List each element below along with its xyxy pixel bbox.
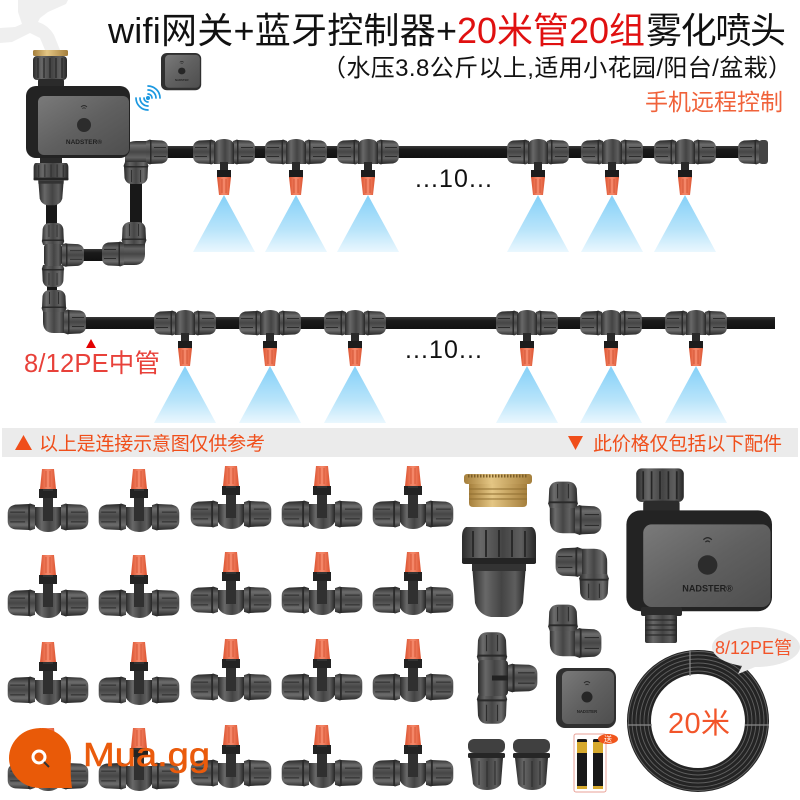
PE pipe coil [628,651,769,790]
tee fitting [477,632,537,724]
upper spray cones [193,195,716,252]
brass adapter small [33,50,68,56]
pipe type bubble: 8/12PE管 [715,638,792,658]
water timer controller [26,56,130,158]
pipe type bubble [712,627,800,674]
gateway [556,668,616,728]
batteries [574,734,618,792]
diagram pipes [46,146,775,329]
gateway small [161,53,201,90]
left side fittings [42,140,168,334]
end caps [468,739,550,790]
subtitle: （水压3.8公斤以上,适用小花园/阳台/盆栽） [322,55,792,82]
title [107,10,786,51]
Mua.gg watermark [9,728,210,788]
ellipsis labels: ...10... [415,165,492,193]
batteries: 送 [604,734,612,744]
notice band: 以上是连接示意图仅供参考 [39,433,265,455]
upper end cap [738,140,768,164]
title: 20米管20组 [457,10,645,51]
notice band [2,428,798,457]
ellipsis labels [405,165,492,364]
controller product [626,468,772,643]
lower spray cones [154,366,727,423]
watermark faucet [0,0,68,50]
upper nozzle tees [193,139,716,195]
remote control label: 手机远程控制 [645,89,783,115]
notice band: 此价格仅包括以下配件 [593,433,782,455]
length label: 20米 [668,707,730,740]
elbow fittings [548,482,609,658]
ellipsis labels: ...10... [405,336,482,364]
lower nozzle tees [154,310,727,366]
Mua.gg watermark: Mua.gg [83,736,210,773]
tap connector [462,527,536,617]
pipe label: 8/12PE中管 [24,350,160,378]
controller connector [34,156,68,205]
title: 雾化喷头 [646,10,786,51]
title: wifi网关+蓝牙控制器+ [107,10,457,51]
nozzle tee parts grid [8,466,453,791]
wireless signal icon [136,86,160,110]
brass adapter [464,474,532,507]
